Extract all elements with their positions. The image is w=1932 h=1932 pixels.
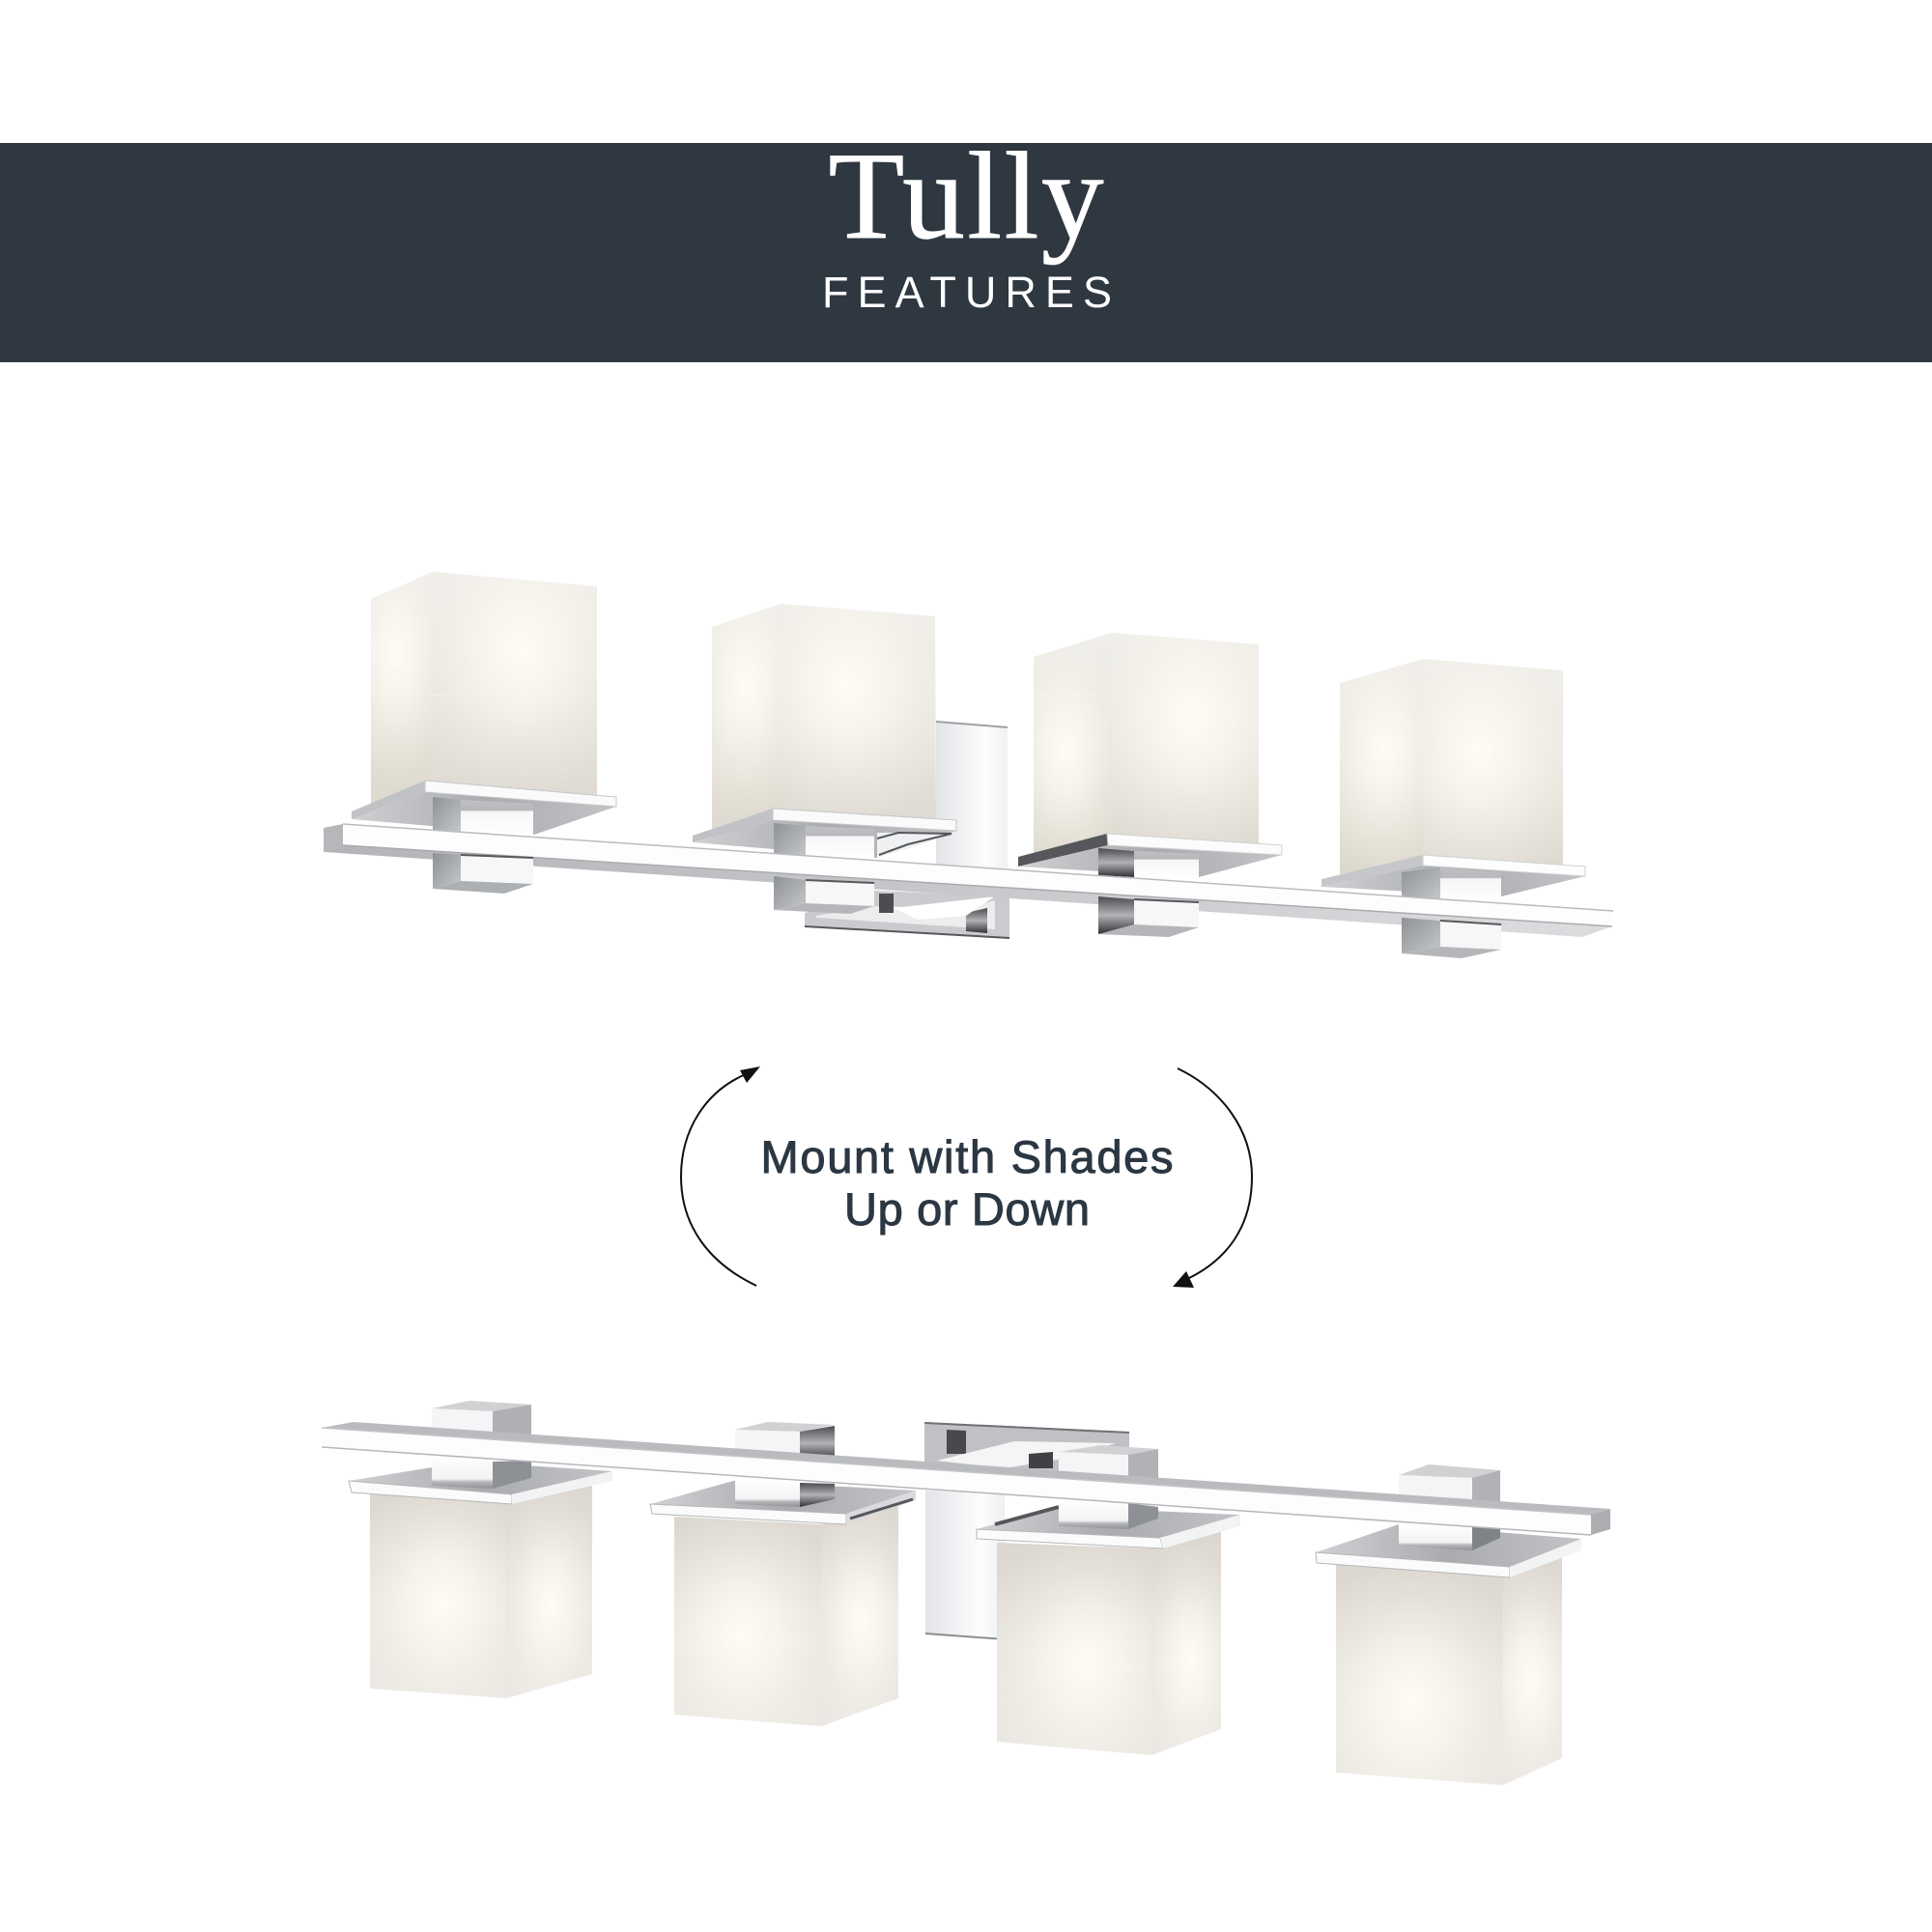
arrow: left arc pointing up [681, 1066, 760, 1286]
text: mount with shades up or down: Mount with Shades [761, 1131, 1173, 1182]
upper post 2 [735, 1422, 835, 1461]
lower post 3 [1098, 896, 1199, 937]
mounting bracket [805, 891, 1009, 939]
lower post 4 [1402, 918, 1501, 958]
shade 3 [1034, 633, 1259, 855]
shade 4 [1336, 1555, 1562, 1785]
horizontal bar [322, 1422, 1610, 1535]
plate and upper post 3 [1018, 834, 1282, 879]
upper post 3 [1059, 1445, 1158, 1481]
upper fixture: shades up [324, 572, 1613, 958]
upper post 4 [1399, 1464, 1500, 1504]
text: mount with shades up or down: Up or Down [844, 1183, 1090, 1235]
subtitle: FEATURES: FEATURES [822, 268, 1112, 317]
plate and lower post 1 [349, 1456, 612, 1504]
shade 3 [997, 1531, 1221, 1755]
wall backplate [925, 1491, 1005, 1640]
lower post 2 [774, 876, 874, 914]
wall backplate [936, 721, 1008, 869]
lower fixture: shades down [322, 1401, 1610, 1785]
shade 1 [371, 572, 597, 810]
rotation callout [681, 1066, 1252, 1288]
mounting bracket [924, 1422, 1129, 1478]
lower post 1 [433, 853, 533, 894]
title: Tully: Tully [829, 127, 1103, 265]
horizontal bar [324, 824, 1613, 937]
shade 4 [1340, 659, 1563, 874]
plate and lower post 4 [1316, 1523, 1581, 1577]
header band [0, 127, 1932, 362]
plate and upper post 4 [1321, 855, 1585, 903]
plate and lower post 3 [977, 1500, 1240, 1548]
upper post 1 [432, 1401, 531, 1441]
plate and lower post 2 [650, 1480, 916, 1524]
shade 2 [712, 604, 936, 840]
shade 2 [674, 1502, 898, 1726]
plate and upper post 1 [352, 781, 616, 837]
shade 1 [370, 1483, 592, 1698]
plate and upper post 2 [693, 809, 956, 860]
shade light seam [371, 695, 1563, 696]
arrow: right arc pointing down [1173, 1068, 1252, 1288]
